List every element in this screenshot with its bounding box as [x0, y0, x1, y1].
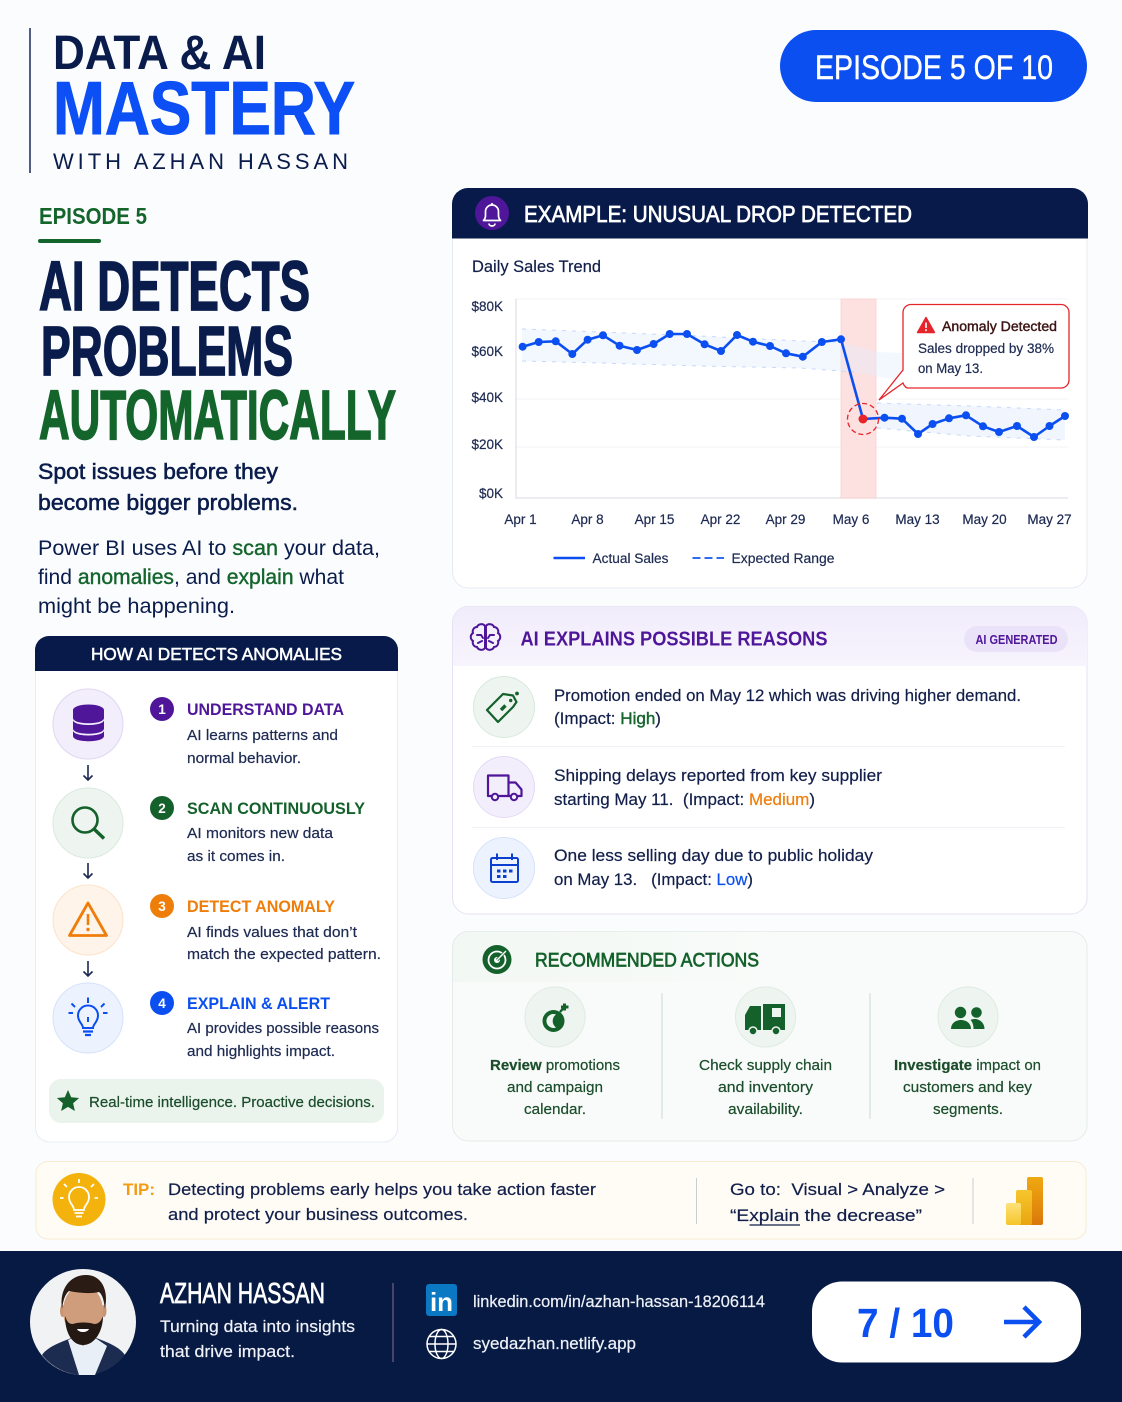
x axis labels: Apr 8 [571, 512, 604, 527]
action: check supply chain: and inventory [718, 1080, 814, 1096]
step 4 [150, 991, 379, 1060]
step 4: EXPLAIN & ALERT [187, 994, 331, 1013]
author name: AZHAN HASSAN [160, 1278, 325, 1310]
icon: brain [471, 624, 500, 650]
action: investigate impact: Investigate impact on [894, 1058, 1041, 1074]
chart title: Daily Sales Trend [472, 258, 601, 276]
step 2: SCAN CONTINUOUSLY [187, 799, 366, 818]
brand title block [30, 27, 355, 174]
panel header: EXAMPLE: UNUSUAL DROP DETECTED [524, 201, 912, 227]
panel header: HOW AI DETECTS ANOMALIES [91, 644, 342, 664]
step 4: AI provides possible reasons [187, 1021, 379, 1037]
x axis labels: May 27 [1027, 512, 1072, 527]
action: review promotions: and campaign [507, 1080, 603, 1096]
x axis labels: Apr 22 [701, 512, 740, 527]
author photo [30, 1269, 136, 1375]
action: review promotions [490, 987, 620, 1118]
reason: promotion ended: Promotion ended on May 12 which was driving higher demand. [554, 687, 1021, 705]
main headline: AUTOMATICALLY [39, 376, 396, 454]
reason: public holiday: One less selling day due to public holiday [554, 847, 874, 865]
step 1: AI learns patterns and [187, 728, 338, 744]
panel: unusual drop example [452, 188, 1088, 588]
action: check supply chain: Check supply chain [699, 1058, 832, 1074]
y axis labels: $40K [471, 390, 503, 405]
panel header [453, 606, 1087, 666]
reason: shipping delays [474, 756, 883, 818]
icon: light bulb [53, 983, 123, 1053]
brand title block: MASTERY [53, 66, 355, 150]
episode pill: EPISODE 5 OF 10 [815, 49, 1053, 87]
tip text: Detecting problems early helps you take action faster [168, 1180, 596, 1199]
reason: public holiday [474, 838, 874, 898]
go-to instruction [730, 1180, 945, 1225]
action: check supply chain: availability. [728, 1102, 803, 1118]
callout: anomaly detected: on May 13. [918, 361, 983, 376]
step 4: 4 [158, 996, 166, 1011]
episode label [38, 203, 147, 243]
y axis labels: $0K [479, 486, 503, 501]
page counter: 7 / 10 [857, 1300, 954, 1346]
linkedin link: linkedin.com/in/azhan-hassan-18206114 [473, 1293, 765, 1311]
step 2: as it comes in. [187, 849, 285, 865]
reason: shipping delays: Shipping delays reported from key supplier [554, 767, 883, 785]
step 3: DETECT ANOMALY [187, 897, 336, 916]
action: review promotions: Review promotions [490, 1058, 620, 1074]
icon: warning [53, 885, 123, 955]
icon: Power BI [1006, 1177, 1043, 1225]
step 2: AI monitors new data [187, 826, 334, 842]
step 3: 3 [158, 899, 166, 914]
callout: real-time intelligence [49, 1079, 384, 1123]
go-to instruction: Go to: Visual > Analyze > [730, 1180, 945, 1199]
footer [0, 1251, 1122, 1402]
step 3: match the expected pattern. [187, 947, 381, 963]
page counter [812, 1282, 1081, 1362]
linkedin link: in [430, 1287, 453, 1317]
subtitle [38, 459, 298, 515]
tip text: and protect your business outcomes. [168, 1205, 468, 1224]
actual sales line [519, 330, 1069, 441]
x axis labels: Apr 15 [635, 512, 674, 527]
badge: AI generated: AI GENERATED [976, 633, 1058, 647]
panel: AI explains possible reasons [452, 606, 1087, 914]
step 1: 1 [158, 702, 166, 717]
intro paragraph: find anomalies, and explain what [38, 566, 344, 589]
episode label: EPISODE 5 [39, 203, 147, 229]
step 3: AI finds values that don’t [187, 925, 357, 941]
episode pill [780, 30, 1087, 102]
tip bar [36, 1162, 1086, 1239]
author tagline: Turning data into insights [160, 1317, 355, 1336]
icon: tip bulb [52, 1173, 106, 1226]
step 1: UNDERSTAND DATA [187, 700, 344, 719]
subtitle: Spot issues before they [38, 459, 278, 484]
panel header [35, 636, 398, 671]
x axis labels [504, 512, 1072, 527]
reason: promotion ended [474, 676, 1021, 738]
intro paragraph: Power BI uses AI to scan your data, [38, 537, 380, 560]
tip text [123, 1180, 596, 1224]
arrow [84, 961, 92, 976]
step 3 [150, 894, 381, 963]
reason: public holiday: on May 13. (Impact: Low) [554, 871, 753, 889]
action: investigate impact [894, 987, 1041, 1118]
line chart: daily sales [471, 299, 1072, 566]
arrow [84, 765, 92, 780]
go-to instruction: “Explain the decrease” [730, 1206, 922, 1225]
x axis labels: Apr 1 [504, 512, 537, 527]
legend: Actual Sales [592, 551, 669, 566]
intro paragraph: might be happening. [38, 595, 235, 618]
panel header: AI EXPLAINS POSSIBLE REASONS [520, 628, 828, 650]
badge: AI generated [964, 626, 1068, 652]
panel: recommended actions [452, 932, 1087, 1141]
icon: database [53, 689, 123, 759]
callout: anomaly detected: Sales dropped by 38% [918, 341, 1054, 356]
arrow [84, 863, 92, 878]
subtitle: become bigger problems. [38, 490, 298, 515]
main headline [39, 247, 396, 454]
step 1: normal behavior. [187, 751, 301, 767]
step 4: and highlights impact. [187, 1044, 335, 1060]
legend [554, 551, 834, 566]
panel: how AI detects anomalies [35, 636, 398, 1142]
x axis labels: May 13 [895, 512, 940, 527]
action: check supply chain [699, 987, 832, 1118]
panel header: RECOMMENDED ACTIONS [535, 950, 759, 972]
author tagline [160, 1317, 355, 1361]
intro paragraph [38, 537, 380, 618]
tip text: TIP: [123, 1180, 155, 1199]
reason: shipping delays: starting May 11. (Impact: Medium) [554, 791, 815, 809]
anomaly marker [848, 404, 878, 434]
icon: target [482, 945, 512, 974]
reason: promotion ended: (Impact: High) [554, 710, 661, 728]
brand title block: WITH AZHAN HASSAN [53, 149, 348, 174]
x axis labels: May 20 [962, 512, 1007, 527]
main headline: AI DETECTS [39, 247, 310, 325]
y axis labels [471, 299, 503, 501]
action: investigate impact: customers and key [903, 1080, 1033, 1096]
callout: anomaly detected [879, 304, 1069, 400]
action: review promotions: calendar. [524, 1102, 586, 1118]
callout: anomaly detected: Anomaly Detected [942, 319, 1057, 334]
panel header [453, 932, 770, 982]
main headline: PROBLEMS [41, 312, 293, 390]
step 2 [150, 796, 366, 865]
step 1 [150, 697, 344, 767]
step 2: 2 [158, 801, 166, 816]
callout: real-time intelligence: Real-time intelligence. Proactive decisions. [89, 1095, 375, 1111]
icon: magnifier [53, 788, 123, 858]
author tagline: that drive impact. [160, 1342, 295, 1361]
y axis labels: $20K [471, 437, 503, 452]
legend: Expected Range [732, 551, 834, 566]
expected range band [522, 329, 1065, 440]
website link: syedazhan.netlify.app [473, 1335, 636, 1353]
x axis labels: May 6 [833, 512, 869, 527]
brand title block: DATA & AI [53, 27, 266, 80]
website link [427, 1330, 636, 1358]
x axis labels: Apr 29 [766, 512, 805, 527]
anomaly band [841, 299, 876, 498]
y axis labels: $80K [471, 299, 503, 314]
linkedin link [426, 1284, 765, 1317]
y axis labels: $60K [471, 344, 503, 359]
action: investigate impact: segments. [933, 1102, 1003, 1118]
panel header [452, 188, 1088, 238]
